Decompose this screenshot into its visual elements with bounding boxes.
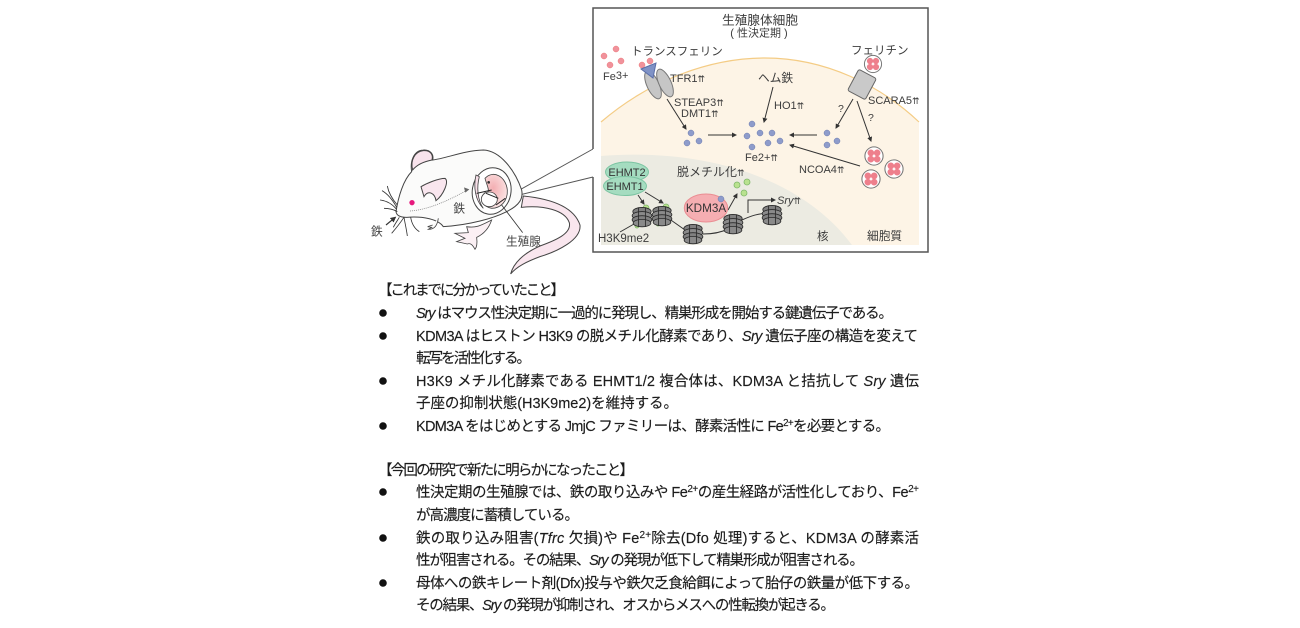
pathway labels: TFR1⇈ — [670, 73, 706, 85]
text: known items: 転写を活性化する。 — [416, 350, 531, 367]
EHMT2 — [606, 162, 648, 182]
cytoplasm — [601, 58, 919, 245]
panel: gonadal somatic cell — [593, 8, 928, 252]
DNA strand — [668, 213, 766, 234]
mouse tail — [511, 196, 580, 274]
text block: newly revealed — [378, 462, 919, 614]
text: new findings items: 性決定期の生殖腺では、鉄の取り込みや Fe — [416, 485, 688, 501]
pathway labels: H3K9me2 — [598, 233, 649, 245]
EHMT2: EHMT2 — [608, 167, 646, 179]
mouse eye — [409, 200, 415, 205]
label: gonad: 生殖腺 — [506, 235, 541, 249]
hind leg — [455, 220, 492, 249]
text: new findings items: の産生経路が活性化しており、Fe — [698, 484, 909, 501]
heading: new findings: 【今回の研究で新たに明らかになったこと】 — [378, 462, 634, 479]
pathway labels: Fe2+⇈ — [745, 152, 778, 164]
text: known items: Sry はマウス性決定期に一過的に発現し、精巣形成を開始する鍵遺伝子である。 — [416, 305, 893, 322]
bullet list: known — [379, 309, 387, 430]
mouse body — [396, 150, 522, 227]
nucleus — [601, 155, 852, 245]
Fe3+ dots — [601, 46, 653, 68]
heading: known: 【これまでに分かっていたこと】 — [378, 282, 565, 299]
EHMT1: EHMT1 — [606, 181, 644, 193]
callout lines from gonad to panel — [507, 149, 593, 198]
text: new findings items: が高濃度に蓄積している。 — [416, 507, 579, 524]
text: new findings items: 2+ — [908, 484, 919, 495]
text: new findings items: その結果、Sry の発現が抑制され、オスからメスへの性転換が起きる。 — [416, 597, 835, 614]
pathway labels: ヘム鉄 — [758, 71, 793, 85]
mouse ear — [412, 151, 446, 201]
embryo window — [469, 165, 515, 217]
panel title — [722, 12, 798, 40]
text: known items: 子座の抑制状態(H3K9me2)を維持する。 — [416, 395, 678, 412]
EHMT1 — [604, 176, 646, 196]
transferrin label: トランスフェリン — [631, 46, 723, 58]
SCARA5 label: SCARA5⇈ — [868, 95, 920, 107]
pathway labels: 核 — [817, 230, 829, 243]
pathway labels: ? — [868, 112, 874, 124]
pathway arrows — [638, 87, 871, 213]
gonad leader line — [502, 205, 523, 233]
panel title: ( 性決定期 ) — [730, 26, 788, 40]
label: iron outside: 鉄 — [371, 225, 383, 239]
Fe2+ dots — [684, 121, 840, 150]
pathway labels: 脱メチル化⇈ — [677, 164, 745, 179]
text: new findings items: 2+ — [639, 530, 651, 541]
pathway labels: フェリチン — [851, 44, 908, 57]
text: new findings items: 母体への鉄キレート剤(Dfx)投与や鉄欠乏食給餌によって胎仔の鉄量が低下する。 — [416, 575, 919, 592]
KDM3A — [684, 194, 728, 222]
text block: what was known — [378, 282, 920, 435]
text: new findings items: 性が阻害される。その結果、Sry の発現が低下して精巣形成が阻害される。 — [416, 552, 864, 569]
Sry label: Sry⇈ — [777, 195, 802, 207]
front paw — [428, 218, 438, 229]
pathway labels: NCOA4⇈ — [799, 164, 845, 176]
nucleosomes — [632, 205, 782, 244]
pathway labels — [598, 44, 908, 245]
text: new findings items: 2+ — [687, 484, 698, 495]
label: iron inside: 鉄 — [453, 201, 465, 215]
text: known items: を必要とする。 — [793, 418, 890, 435]
pathway labels: STEAP3⇈ — [674, 97, 724, 109]
text: new findings items: 除去(Dfo 処理)すると、KDM3A の酵素活 — [651, 530, 919, 547]
panel frame — [593, 8, 928, 252]
TFR1 receptor — [641, 63, 677, 101]
pathway labels: DMT1⇈ — [681, 108, 719, 120]
illustration: mouse with gonad — [371, 150, 580, 274]
KDM3A: KDM3A — [686, 202, 726, 215]
H3K9me2 pointer — [620, 224, 634, 232]
Fe3+ label: Fe — [603, 71, 616, 83]
text: new findings items: 鉄の取り込み阻害(Tfrc 欠損)や Fe — [416, 531, 639, 547]
methyl dots — [635, 179, 750, 228]
panel title: 生殖腺体細胞 — [722, 12, 798, 28]
text: known items — [416, 305, 920, 435]
text: known items: H3K9 メチル化酵素である EHMT1/2 複合体は、KDM3A と拮抗して Sry 遺伝 — [416, 373, 920, 390]
iron arrow to nose — [386, 217, 395, 225]
bullet list: new findings — [379, 488, 387, 587]
mouse whiskers — [380, 186, 419, 236]
text: known items: 2+ — [783, 418, 794, 429]
text: known items: KDM3A はヒストン H3K9 の脱メチル化酵素であり、Sry 遺伝子座の構造を変えて — [416, 328, 918, 345]
pathway labels: HO1⇈ — [774, 100, 805, 112]
pathway labels: ? — [838, 103, 844, 115]
Fe3+ label: 3+ — [616, 70, 628, 82]
pathway labels: 細胞質 — [867, 229, 902, 243]
iron arrow in body — [410, 190, 467, 211]
ferritin and SCARA5 — [848, 55, 903, 188]
text: new findings items — [416, 484, 919, 614]
text: known items: KDM3A をはじめとする JmjC ファミリーは、酵素活性に Fe — [416, 419, 784, 435]
